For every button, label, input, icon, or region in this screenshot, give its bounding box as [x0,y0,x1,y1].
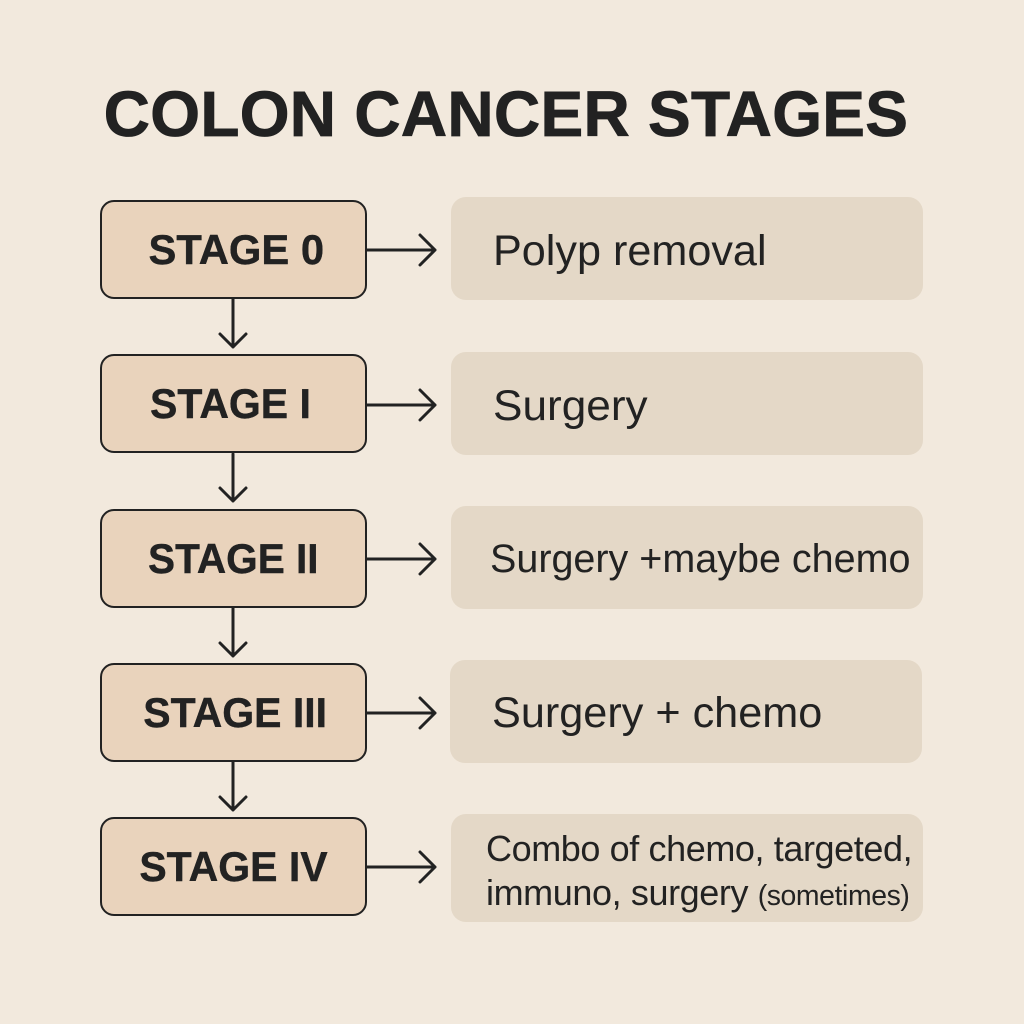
treatment: surgery maybe chemo [451,506,923,609]
stage IV box: STAGE IV [139,842,328,890]
treatment: surgery: Surgery [493,382,648,430]
treatment: surgery maybe chemo: Surgery +maybe chemo [490,536,910,580]
arrow: stage III to stage IV [220,762,246,810]
treatment: polyp removal: Polyp removal [493,226,767,274]
arrow: stage 0 to treatment [367,235,435,265]
title: COLON CANCER STAGES [104,78,908,150]
arrow: stage 0 to stage I [220,299,246,347]
stage II box [100,508,366,608]
treatment: combination [451,814,923,922]
stage I box: STAGE I [150,380,311,427]
stage II box: STAGE II [148,534,319,582]
stage IV box [100,816,366,916]
treatment: surgery [451,352,923,455]
treatment: surgery plus chemo: Surgery + chemo [492,688,822,736]
arrow: stage I to stage II [220,454,246,501]
arrow: stage I to treatment [367,390,435,420]
treatment: combination: Combo of chemo, targeted, [486,828,912,869]
treatment: combination: immuno, surgery (sometimes) [486,872,909,913]
arrow: stage IV to treatment [367,852,435,882]
arrow: stage II to treatment [367,544,435,574]
stage I box [100,354,366,453]
stage 0 box [100,200,366,298]
treatment: surgery plus chemo [450,660,922,763]
stage III box [100,662,366,762]
treatment: polyp removal [451,197,923,300]
stage III box: STAGE III [144,688,327,736]
arrow: stage II to stage III [220,608,246,656]
stage 0 box: STAGE 0 [148,226,324,272]
arrow: stage III to treatment [367,698,435,728]
